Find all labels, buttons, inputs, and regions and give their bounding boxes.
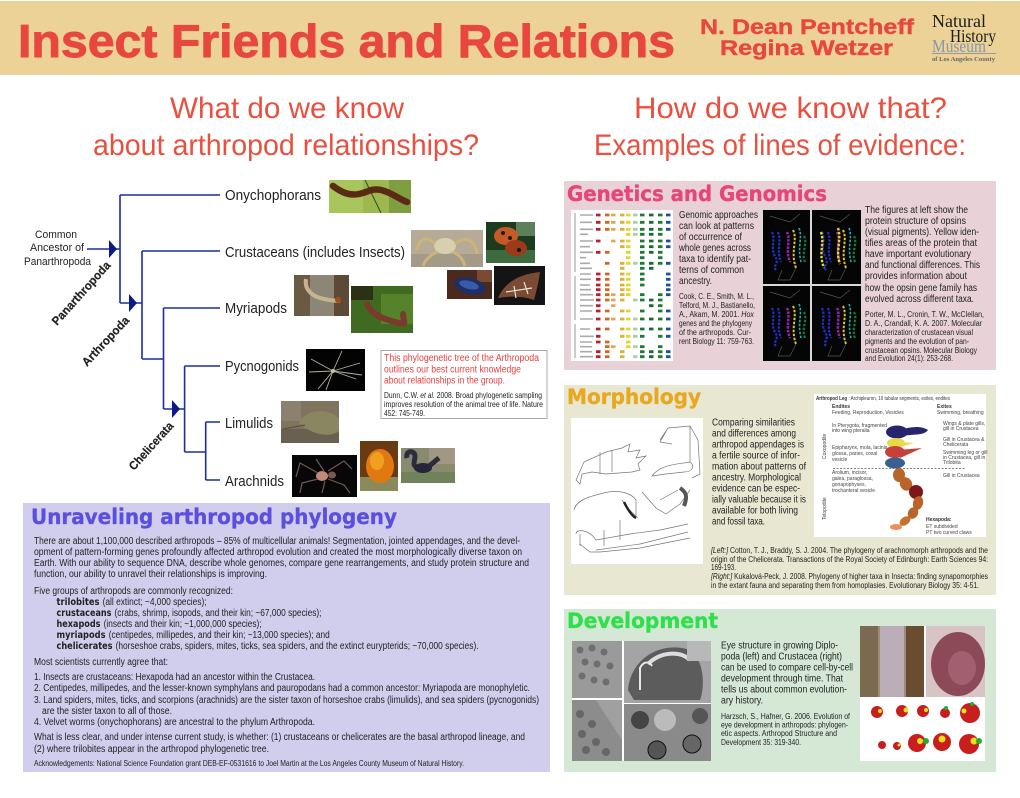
list: five groups: (all extinct; ~4,000 species); <box>103 597 207 608</box>
panel: genetics and genomics <box>564 181 996 370</box>
right column heading <box>594 92 966 162</box>
text: comparing similarities: mation about patterns of <box>712 462 806 472</box>
intro paragraph: function, our ability to unravel their relationships is improving. <box>34 569 267 580</box>
taxon labels: Onychophorans <box>225 188 321 204</box>
references: Cotton and Kukalova-Peck: in the extant fauna and separating them from homoplasies. Evolutionary Biology 35: 4-51. <box>711 581 979 590</box>
taxon labels: Crustaceans (includes Insects) <box>225 245 405 261</box>
text: comparing similarities <box>712 418 806 528</box>
photo: crab <box>411 230 483 267</box>
figure: gene occurrence table <box>571 210 673 361</box>
list: agreements: 2. Centipedes, millipedes, and the lesser-known symphylans and pauropodans had a common ancestor: Myriapoda are monophyletic. <box>34 683 530 694</box>
reference: Cook et al: Cook, C. E., Smith, M. L., <box>679 292 754 301</box>
list: five groups: (centipedes, millipedes, and their kin; ~13,000 species); and <box>109 630 330 641</box>
tree branches <box>87 195 220 480</box>
reference: Harzsch and Hafner: eye development in arthropods: phylogen- <box>721 720 848 730</box>
leg segments <box>885 426 928 530</box>
figure: arthropod leg diagram: Arthropod Leg : Archipleuron, 10 tubular segments, exites, endites <box>816 396 950 402</box>
figure: arthropod leg diagram: Trilobita <box>943 460 961 466</box>
text: opsin figures: provides information about <box>865 271 967 282</box>
text: genomic approaches: Genomic approaches <box>679 210 758 221</box>
reference: Cook et al: A., Akam, M. 2001. Hox <box>679 310 755 319</box>
intro paragraph: opment of pattern-forming genes profoundly affected arthropod evolution and created the most morphologically diverse taxon on <box>34 547 522 558</box>
panel: morphology <box>564 385 996 595</box>
taxon labels: Myriapods <box>225 301 287 317</box>
text: opsin figures: evolved across different taxa. <box>865 294 974 305</box>
figure: arthropod leg diagram: into wing pteralia <box>832 428 870 434</box>
heading: unraveling arthropod phylogeny: Unraveling arthropod phylogeny <box>31 505 397 529</box>
left column heading: What do we know <box>170 92 404 125</box>
list: five groups <box>34 586 479 652</box>
phylogenetic tree <box>24 188 405 490</box>
references: Cotton and Kukalova-Peck <box>710 546 988 590</box>
reference: Cook et al: genes and the phylogeny <box>679 319 752 328</box>
reference: Porter et al <box>865 310 984 363</box>
text: opsin figures: how the opsin gene family has <box>865 283 977 294</box>
text: comparing similarities: Comparing similarities <box>712 418 795 428</box>
text: opsin figures: The figures at left show the <box>865 205 968 216</box>
figure: arthropod leg diagram: gonapophyses, <box>832 482 866 488</box>
list: agreements: 1. Insects are crustaceans: Hexapoda had an ancestor within the Crustacea. <box>34 672 315 683</box>
acknowledgements: Acknowledgements: National Science Foundation grant DEB-EF-0531616 to Joel Martin at the Los Angeles County Museum of Natural History. <box>34 759 464 768</box>
reference: Porter et al: D. A., Crandall, K. A. 2007. Molecular <box>865 319 982 328</box>
figure: arthropod leg diagram: In Pterygota, fragmented <box>832 423 887 429</box>
figure: arthropod leg diagram: gill in Crustacea <box>943 426 979 432</box>
list: five groups: Five groups of arthropods are commonly recognized: <box>34 586 233 597</box>
photo: millipede <box>351 286 413 333</box>
reference: Porter et al: and Evolution 24(1): 253-268. <box>865 354 953 363</box>
label: common ancestor: Ancestor of <box>30 242 85 254</box>
callout: tree explanation <box>381 350 547 418</box>
list: five groups: chelicerates <box>56 641 113 652</box>
figure: arthropod leg diagram: in Crustacea, gill in <box>943 455 985 461</box>
reference: Porter et al: pigments and the evolution of pan- <box>865 337 969 346</box>
text: opsin figures: protein structure of opsins <box>865 216 966 227</box>
left column heading: about arthropod relationships? <box>93 129 479 162</box>
photo: moth <box>494 266 545 305</box>
photo: centipede <box>294 275 349 316</box>
logo: Natural History Museum: Museum <box>932 36 986 56</box>
text: genomic approaches: taxa to identify pat- <box>679 254 751 265</box>
reference: Porter et al: crustacean opsins. Molecular Biology <box>865 346 977 355</box>
right column heading: How do we know that? <box>634 92 947 125</box>
photo: onychophoran <box>329 180 411 213</box>
label: common ancestor: Panarthropoda <box>24 256 92 268</box>
figure: arthropod leg diagram: PT two curved claws <box>926 530 972 536</box>
list: five groups: (horseshoe crabs, spiders, mites, ticks, sea spiders, and the extinct eurypterids; ~70,000 species). <box>116 641 479 652</box>
callout: tree explanation: improves resolution of the animal tree of life. Nature <box>384 400 543 409</box>
clade label: Panarthropoda: Panarthropoda <box>49 258 114 328</box>
text: eye structure: ary history. <box>721 696 763 706</box>
figure: diplopod eye micrographs <box>572 641 711 761</box>
list: agreements: 3. Land spiders, mites, ticks, and scorpions (arachnids) are the sister taxon of horseshoe crabs (limulids), and sea spiders (pycnogonids) <box>34 695 539 706</box>
figure: arthropod leg diagram: Hexapoda: <box>926 517 952 523</box>
callout: tree explanation: This phylogenetic tree of the Arthropoda <box>384 353 539 364</box>
text: eye structure: poda (left) and Crustacea (right) <box>721 652 842 662</box>
list: five groups: myriapods <box>56 630 106 641</box>
logo: Natural History Museum: of Los Angeles County <box>932 56 996 63</box>
text: comparing similarities: a fertile source of infor- <box>712 450 800 462</box>
title: Insect Friends and Relations <box>18 15 675 67</box>
list: five groups: crustaceans <box>56 608 112 619</box>
reference: Harzsch and Hafner: etic aspects. Arthropod Structure and <box>721 729 837 738</box>
heading: morphology: Morphology <box>567 385 701 409</box>
figure: arthropod leg diagram: Exites <box>937 404 952 410</box>
figure: appendage line drawings <box>571 418 703 564</box>
references: Cotton and Kukalova-Peck: 169-193. <box>711 563 736 572</box>
callout: tree explanation: about relationships in the group. <box>384 376 505 386</box>
list: agreements <box>34 657 539 728</box>
figure: arthropod leg diagram: vesicle <box>832 457 848 463</box>
figure: arthropod leg diagram: Gill in Crustacea <box>943 473 980 479</box>
figure: arthropod leg diagram: trochanteral vesicle <box>832 488 875 494</box>
panel: development <box>564 609 996 772</box>
left column heading <box>93 92 479 162</box>
figure: arthropod leg diagram: galea, paraglossa, <box>832 476 873 482</box>
taxon labels <box>225 188 405 490</box>
figure: crustacean eye development <box>860 626 985 761</box>
text: opsin figures: (visual pigments). Yellow iden- <box>865 227 979 238</box>
figure: arthropod leg diagram: Endites <box>832 404 850 410</box>
authors <box>700 16 915 60</box>
figure: arthropod leg diagram: ET subdivided <box>926 524 958 530</box>
photo: horseshoe crab <box>281 401 339 443</box>
reference: Harzsch and Hafner: Harzsch, S., Hafner, G. 2006. Evolution of <box>721 712 851 721</box>
figure: arthropod leg diagram: Coxopodite <box>822 433 828 459</box>
authors: N. Dean Pentcheff <box>700 16 915 39</box>
text: genomic approaches: of occurrence of <box>679 232 742 243</box>
text: opsin figures <box>865 205 980 305</box>
intro paragraph: There are about 1,100,000 described arthropods – 85% of multicellular animals! Segmentation, jointed appendages, and the devel- <box>34 536 520 547</box>
figure: arthropod leg diagram: Feeding, Reproduction, Vesicles <box>832 410 904 416</box>
text: comparing similarities: evidence can be espec- <box>712 484 800 494</box>
photo: spider <box>292 455 357 497</box>
list: agreements: 4. Velvet worms (onychophorans) are ancestral to the phylum Arthropoda. <box>34 717 315 728</box>
figure: arthropod leg diagram: Telopodite <box>822 497 828 520</box>
photo: scorpion <box>401 448 455 483</box>
text: opsin figures: tifies areas of the protein that <box>865 238 977 249</box>
logo: Natural History Museum: History <box>950 26 996 46</box>
photo: isopod <box>447 270 492 299</box>
figure: opsin protein structures <box>761 209 862 362</box>
text: opsin figures: have important evolutionary <box>865 249 971 260</box>
figure: arthropod leg diagram: glossa, paries, coxal <box>832 451 877 457</box>
taxon labels: Limulids <box>225 416 273 432</box>
text: eye structure: development through time. That <box>721 674 843 684</box>
taxon labels: Pycnogonids <box>225 359 299 375</box>
reference: Cook et al <box>679 292 755 346</box>
text: comparing similarities: ancestry. Morphological <box>712 472 801 484</box>
list: five groups: hexapods <box>56 619 101 630</box>
figure: arthropod leg diagram: Epipharynx, mola, lacinia, <box>832 445 889 451</box>
reference: Cook et al: Telford, M. J., Bastianello, <box>679 301 755 310</box>
text: eye structure: tells us about common evolution- <box>721 684 847 696</box>
list: agreements: Most scientists currently agree that: <box>34 657 168 668</box>
text: comparing similarities: arthropod appendages is <box>712 440 804 450</box>
intro paragraph: Earth. With our ability to sequence DNA, describe whole genomes, compare gene rearrangements, and study protein structure and <box>34 558 529 569</box>
reference: Harzsch and Hafner <box>721 712 851 747</box>
figure: arthropod leg diagram: Chelicerata <box>943 442 969 448</box>
clade label: Arthropoda: Arthropoda <box>79 313 132 369</box>
list: five groups: (insects and their kin; ~1,000,000 species); <box>104 619 262 630</box>
text: comparing similarities: ially valuable because it is <box>712 494 806 506</box>
reference: Harzsch and Hafner: Development 35: 319-340. <box>721 738 801 747</box>
photo: sea spider <box>306 349 365 391</box>
text: genomic approaches: can look at patterns <box>679 221 754 232</box>
figure: arthropod leg diagram: Arolium, incisor, <box>832 470 867 476</box>
photo: orange arachnid <box>360 441 398 491</box>
taxon labels: Arachnids <box>225 474 284 490</box>
right column heading: Examples of lines of evidence: <box>594 129 966 162</box>
reference: Porter et al: characterization of crustacean visual <box>865 328 973 337</box>
reference: Porter et al: Porter, M. L., Cronin, T. W., McClellan, <box>865 310 984 319</box>
figure: arthropod leg diagram <box>814 394 987 537</box>
paragraph: open questions <box>34 732 525 755</box>
callout: tree explanation: outlines our best current knowledge <box>384 364 521 376</box>
text: eye structure <box>721 640 853 706</box>
text: genomic approaches <box>678 210 758 287</box>
text: genomic approaches: whole genes across <box>678 243 751 254</box>
figure: arthropod leg diagram: Gill in Crustacea & <box>943 437 985 443</box>
label: common ancestor <box>24 229 92 268</box>
text: opsin figures: and functional differences. This <box>865 260 980 271</box>
list: five groups: (crabs, shrimp, isopods, and their kin; ~67,000 species); <box>114 608 322 619</box>
list: agreements: are the sister taxon to all of those. <box>42 706 172 717</box>
clade label: Chelicerata: Chelicerata <box>126 419 177 473</box>
reference: Cook et al: of the arthropods. Cur- <box>679 328 751 337</box>
callout: tree explanation: 452: 745-749. <box>384 409 425 418</box>
figure: arthropod leg diagram: Swimming leg or gill <box>943 450 987 456</box>
callout: tree explanation: Dunn, C.W. et al. 2008. Broad phylogenetic sampling <box>384 391 542 400</box>
header band <box>0 1 1020 75</box>
figure: arthropod leg diagram: Wings & plate gills, <box>943 421 985 427</box>
photo: ladybird beetles <box>486 222 535 263</box>
list: five groups: trilobites <box>56 597 100 608</box>
text: genomic approaches: terns of common <box>679 265 744 276</box>
text: comparing similarities: and fossil taxa. <box>712 516 765 528</box>
paragraph: open questions: (2) where trilobites appear in the arthropod phylogenetic tree. <box>34 744 269 755</box>
intro paragraph <box>34 536 529 580</box>
paragraph: open questions: What is less clear, and under intense current study, is whether: (1) crustaceans or chelicerates are the basal arthropod lineage, and <box>34 732 525 743</box>
panel: unraveling arthropod phylogeny <box>23 503 550 772</box>
reference: Cook et al: rent Biology 11: 759-763. <box>679 337 754 346</box>
figure: arthropod leg diagram: Swimming, breathing <box>937 410 984 416</box>
heading: development: Development <box>567 609 718 633</box>
logo: Natural History Museum <box>932 11 996 63</box>
text: comparing similarities: available for both living <box>712 506 798 516</box>
heading: genetics and genomics: Genetics and Genomics <box>567 182 827 206</box>
text: comparing similarities: and differences among <box>712 428 796 440</box>
label: common ancestor: Common <box>35 229 77 241</box>
logo: Natural History Museum: Natural <box>932 11 986 31</box>
text: eye structure: can be used to compare cell-by-cell <box>721 662 853 674</box>
text: genomic approaches: ancestry. <box>679 276 712 287</box>
text: eye structure: Eye structure in growing Diplo- <box>721 640 838 652</box>
authors: Regina Wetzer <box>720 37 893 60</box>
